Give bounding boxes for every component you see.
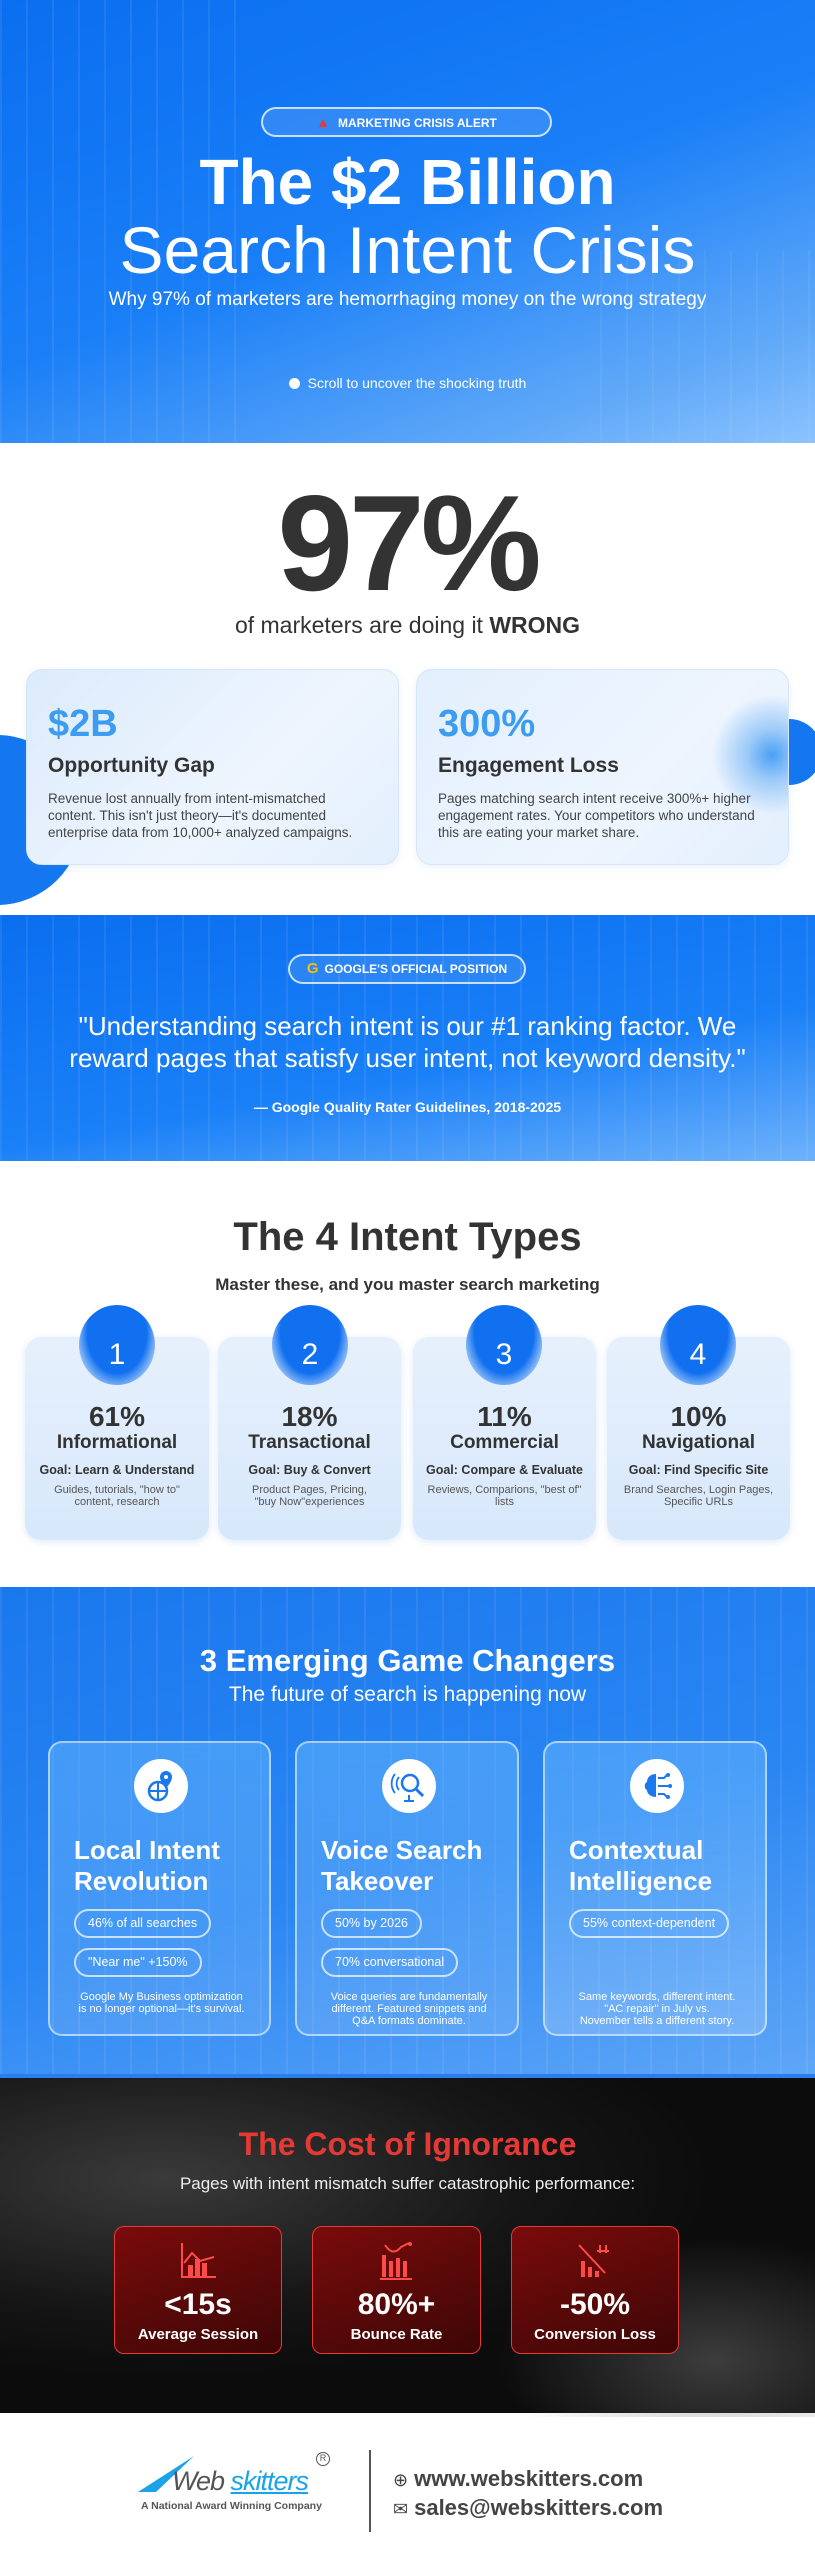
card: local intent: 46% of all searches [88,1916,197,1930]
text: transactional: Product Pages, Pricing, [252,1484,367,1496]
icon: bar chart bounce [380,2242,412,2280]
card: local intent [48,1741,271,2036]
footer logo: Web skitters [172,2466,308,2496]
card: voice search: 50% by 2026 [335,1916,408,1930]
card: opportunity gap: Opportunity Gap [48,754,215,777]
text: informational: content, research [74,1496,160,1508]
card: voice search: 70% conversational [335,1955,444,1969]
number badge 4 [660,1305,736,1385]
stat caption: of marketers are doing it WRONG [235,612,580,638]
card: opportunity gap: $2B [48,703,118,745]
intent types heading: The 4 Intent Types [233,1215,582,1259]
hero section [0,0,815,443]
section subtitle: The future of search is happening now [229,1683,586,1706]
icon: chart up [181,2243,216,2278]
stat card: average session: <15s [164,2288,232,2321]
text: informational: 61% [89,1401,145,1432]
number badge 3 [466,1305,542,1385]
text: navigational: Brand Searches, Login Pages, [624,1484,773,1496]
badge: google's official position: G GOOGLE'S OFFICIAL POSITION [307,960,507,977]
card: voice search: Voice Search [321,1835,482,1865]
card: local intent: Local Intent [74,1835,220,1865]
stat card: average session: Average Session [138,2326,258,2343]
icon: voice search [382,1759,436,1813]
number badge 1 [79,1305,155,1385]
card: informational [25,1337,209,1540]
footer logo: A National Award Winning Company [141,2500,322,2512]
number badge 3: 3 [496,1338,512,1371]
card: voice search: different. Featured snippets and [331,2003,487,2015]
number badge 4: 4 [690,1338,706,1371]
card: local intent: Google My Business optimization [80,1991,243,2003]
attribution: — Google Quality Rater Guidelines, 2018-2025 [254,1099,561,1115]
text: informational [40,1401,194,1508]
section title: The Cost of Ignorance [239,2126,576,2162]
badge: google's official position [288,954,526,984]
card: local intent: "Near me" +150% [88,1955,188,1969]
card: opportunity gap: Revenue lost annually from intent-mismatched content. This isn't just theory—it's documented enterprise data from 10,000+ analyzed campaigns. [48,791,352,840]
big stat 97%: 97% [277,467,538,619]
card: transactional [218,1337,401,1540]
footer contacts: ⊕ www.webskitters.com [393,2466,643,2491]
text: commercial: lists [495,1496,514,1508]
stat card: conversion loss [511,2226,679,2354]
card: voice search [295,1741,519,2036]
text: navigational: 10% [670,1401,727,1432]
number badge 2 [272,1305,348,1385]
footer contacts [393,2466,663,2520]
scroll hint: Scroll to uncover the shocking truth [308,375,526,391]
section subtitle: Pages with intent mismatch suffer catastrophic performance: [180,2174,635,2193]
stat card: average session [114,2226,282,2354]
text: transactional [248,1401,371,1508]
footer contacts: ✉ sales@webskitters.com [393,2495,663,2520]
card: opportunity gap [26,669,399,865]
card: navigational [607,1337,790,1540]
game changers section [0,1587,815,2074]
number badge 1: 1 [109,1338,125,1371]
card: contextual intelligence: November tells a different story. [580,2015,734,2027]
footer logo [138,2452,330,2512]
badge: marketing crisis alert: ▲ MARKETING CRISIS ALERT [316,114,497,130]
text: commercial: 11% [477,1401,532,1432]
text: navigational: Goal: Find Specific Site [629,1463,768,1477]
quote: "Understanding search intent is our #1 ranking factor. We reward pages that satisfy user intent, not keyword density." [69,1011,746,1073]
title: The $2 Billion [199,146,616,218]
intent types heading [215,1215,600,1294]
icon: location globe [134,1759,188,1813]
card: local intent: Revolution [74,1866,208,1896]
card: voice search: Q&A formats dominate. [352,2015,466,2027]
decorative circles [0,735,82,905]
icon: brain circuit [630,1759,684,1813]
footer divider [369,2450,371,2532]
title: Search Intent Crisis [120,213,695,287]
text: commercial: Goal: Compare & Evaluate [426,1463,583,1477]
stat card: conversion loss: Conversion Loss [534,2326,656,2343]
big stat 97% [235,467,580,638]
card: engagement loss: 300% [438,703,535,745]
text: transactional: 18% [281,1401,338,1432]
stat card: bounce rate: Bounce Rate [351,2326,442,2343]
card: contextual intelligence: "AC repair" in July vs. [604,2003,710,2015]
text: transactional: "buy Now"experiences [255,1496,364,1508]
card: engagement loss: Pages matching search intent receive 300%+ higher engagement rates. Your competitors who understand this are eating your market share. [438,791,755,840]
number badge 2: 2 [302,1338,318,1371]
card: engagement loss: Engagement Loss [438,754,619,777]
card: contextual intelligence: Intelligence [569,1866,712,1896]
card: commercial [413,1337,596,1540]
text: navigational [624,1401,773,1508]
text: navigational: Navigational [642,1432,755,1453]
title [120,146,695,287]
text: informational: Guides, tutorials, "how to" [54,1484,180,1496]
card: voice search: Voice queries are fundamentally [331,1991,487,2003]
stat card: bounce rate: 80%+ [358,2288,435,2321]
text: commercial: Reviews, Comparions, "best of" [428,1484,581,1496]
stat card: conversion loss: -50% [560,2288,630,2321]
card: voice search: Takeover [321,1866,433,1896]
card: contextual intelligence: 55% context-dependent [583,1916,715,1930]
text: navigational: Specific URLs [664,1496,733,1508]
cost of ignorance section [0,2074,815,2413]
card: contextual intelligence: Same keywords, different intent. [579,1991,735,2003]
text: transactional: Transactional [248,1432,371,1453]
footer logo: R [320,2453,326,2463]
text: transactional: Goal: Buy & Convert [248,1463,371,1477]
badge: marketing crisis alert [261,107,552,137]
stat card: bounce rate [312,2226,481,2354]
text: informational: Goal: Learn & Understand [40,1463,194,1477]
quote section [0,915,815,1161]
text: commercial [426,1401,583,1508]
card: local intent: is no longer optional—it's survival. [79,2003,244,2015]
card: engagement loss [416,669,789,865]
card: contextual intelligence: Contextual [569,1835,703,1865]
icon: declining chart [578,2244,609,2277]
subtitle: Why 97% of marketers are hemorrhaging money on the wrong strategy [109,289,706,310]
intent cards row [22,1305,792,1544]
intent subtitle: Master these, and you master search marketing [215,1275,600,1294]
text: informational: Informational [57,1432,177,1453]
section title: 3 Emerging Game Changers [200,1643,615,1678]
text: commercial: Commercial [450,1432,559,1453]
card: contextual intelligence [543,1741,767,2036]
